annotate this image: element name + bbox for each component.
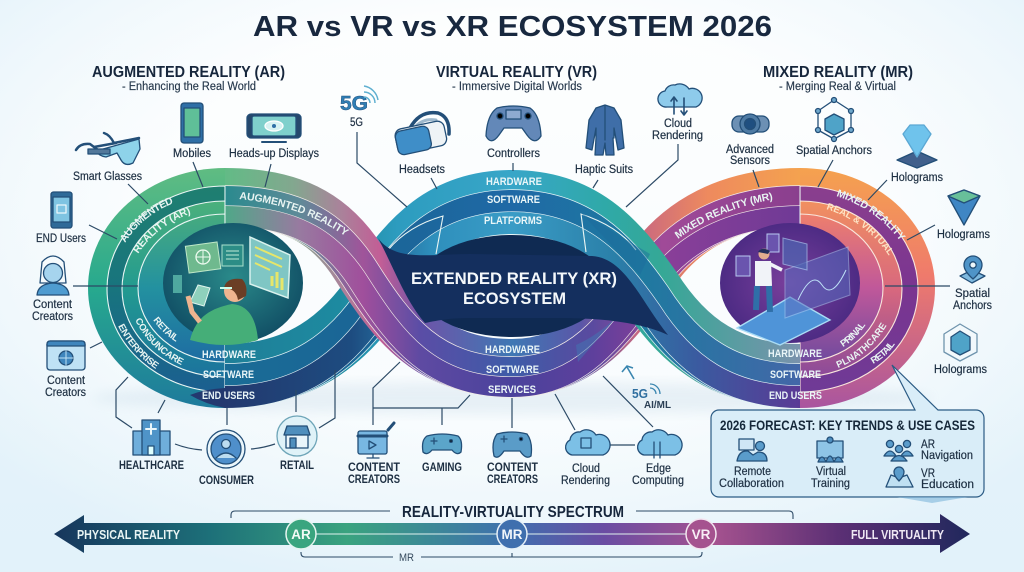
label: VR education — [921, 468, 974, 491]
icon: heads-up display — [247, 114, 301, 142]
ring labels: VR top: SOFTWARE — [487, 194, 540, 206]
label: spatial anchors 2: Spatial — [955, 288, 990, 300]
icon: hologram pyramid — [948, 190, 980, 225]
heading: virtual reality: VIRTUAL REALITY (VR) — [436, 64, 597, 81]
label: holograms 2: Holograms — [937, 229, 990, 241]
icon: sensor camera — [732, 114, 769, 134]
icon: phone scanning — [51, 192, 72, 228]
connector lines — [73, 132, 950, 450]
icon: spatial anchor cube — [816, 98, 854, 142]
label: content creators 2 bottom: CONTENT — [487, 462, 538, 474]
label: cloud rendering top: Cloud — [664, 118, 692, 130]
label: edge computing — [632, 463, 684, 487]
icon: video monitor — [358, 423, 394, 458]
ring labels: AR curved: CONSUNCARE — [136, 318, 184, 365]
ring labels: MR curved: HARDWARE — [768, 348, 822, 360]
ring labels: AR curved: END USERS — [202, 390, 255, 402]
marker: VR — [686, 519, 716, 549]
marker: AR — [286, 519, 316, 549]
label: cloud rendering bottom — [561, 463, 610, 487]
infinity ribbon diagram — [88, 168, 935, 414]
label: content creators 2: Content — [47, 375, 86, 387]
label: haptic suits: Haptic Suits — [575, 164, 633, 176]
label: content creators 2: Creators — [45, 387, 86, 399]
illustration: AR user at screens — [163, 223, 303, 345]
label: edge computing: Computing — [632, 475, 684, 487]
label: AR navigation — [921, 439, 973, 462]
icon: person — [37, 256, 69, 295]
ring labels: MR curved: RETAIL — [870, 343, 895, 364]
label: advanced sensors — [726, 144, 774, 167]
marker: VR: VR — [692, 527, 711, 542]
ring labels: XR bottom: HARDWARE — [485, 344, 540, 356]
ring labels: MR curved — [674, 189, 906, 402]
icon: haptic suit — [586, 105, 624, 155]
ring labels: AR curved: HARDWARE — [202, 349, 256, 361]
label: spatial anchors: Spatial Anchors — [796, 145, 872, 157]
label: cloud rendering top — [652, 118, 703, 142]
label: cloud rendering bottom: Cloud — [572, 463, 600, 475]
icon: game controller — [486, 106, 541, 141]
label: remote collaboration: Collaboration — [719, 478, 784, 490]
label: end users: END Users — [36, 233, 86, 245]
ribbon: MR right half — [512, 197, 800, 387]
heading: mixed reality — [763, 64, 913, 93]
icon: smart glasses — [76, 133, 140, 164]
label: content creators: CONTENT — [348, 462, 400, 474]
heading: forecast: 2026 FORECAST: KEY TRENDS & USE CASES — [720, 417, 975, 433]
label: healthcare: HEALTHCARE — [119, 460, 184, 472]
spectrum heading: REALITY-VIRTUALITY SPECTRUM — [402, 504, 624, 521]
label: cloud rendering bottom: Rendering — [561, 475, 610, 487]
label: VR education: Education — [921, 479, 974, 491]
label: spatial anchors 2: Anchors — [953, 300, 992, 312]
ring labels: MR curved: SOFTWARE — [770, 369, 821, 381]
text: XR title: EXTENDED REALITY (XR) — [411, 269, 617, 288]
icon: browser window — [47, 341, 85, 370]
label: virtual training — [811, 466, 850, 490]
label: mobiles: Mobiles — [173, 148, 211, 160]
label: advanced sensors: Sensors — [730, 155, 770, 167]
marker: MR — [497, 519, 527, 549]
title: AR vs VR vs XR ECOSYSTEM 2026 — [253, 11, 772, 43]
icon: hospital — [133, 420, 170, 455]
label: content creators 2 bottom: CREATORS — [487, 474, 538, 486]
icon: mobile — [181, 103, 203, 143]
label: 5G: 5G — [350, 117, 363, 129]
ring labels: AR curved — [118, 192, 350, 402]
label: physical reality: PHYSICAL REALITY — [77, 527, 180, 542]
label: content creators 1: Content — [33, 299, 73, 311]
icon: consumer — [207, 430, 245, 468]
icon: virtual training — [817, 437, 843, 462]
label: VR education: VR — [921, 468, 935, 480]
label: holograms 1: Holograms — [891, 172, 943, 184]
label: content creators 1: Creators — [32, 311, 73, 323]
label: full virtuality: FULL VIRTUALITY — [851, 527, 944, 542]
label: remote collaboration: Remote — [734, 466, 771, 478]
label: virtual training: Training — [811, 478, 850, 490]
icon: remote collaboration — [737, 439, 767, 461]
spectrum arrow — [54, 514, 970, 553]
ring labels: XR bottom: SOFTWARE — [486, 364, 539, 376]
icon: map pin — [960, 256, 985, 283]
label: heads-up displays: Heads-up Displays — [229, 148, 319, 160]
heading: augmented reality — [92, 64, 285, 93]
label: content creators 1 — [32, 299, 73, 323]
icon: cloud arrows — [658, 84, 702, 115]
MR range bracket: MR — [399, 552, 414, 564]
ring labels: MR curved: REAL & VIRTUAL — [826, 203, 892, 256]
icon: VR headset — [394, 113, 449, 156]
icon: gamepad 2 — [493, 432, 532, 457]
label: virtual training: Virtual — [816, 466, 846, 478]
spectrum heading — [231, 504, 793, 521]
label: remote collaboration — [719, 466, 784, 490]
ring labels: MR curved: MIXED REALITY — [836, 189, 906, 240]
label: controllers: Controllers — [487, 148, 540, 160]
callout: 5G AI/ML: AI/ML — [644, 399, 672, 411]
label: AR navigation: AR — [921, 439, 935, 451]
label: edge computing: Edge — [646, 463, 671, 475]
callout: 5G AI/ML: 5G — [632, 386, 648, 401]
label: headsets: Headsets — [399, 164, 445, 176]
icon: group navigation — [884, 440, 913, 461]
label: gaming: GAMING — [422, 462, 462, 474]
panel: left AR ring — [88, 168, 225, 408]
ring labels: AR curved: ENTERPRISE — [118, 324, 160, 369]
heading: augmented reality: AUGMENTED REALITY (AR) — [92, 64, 285, 81]
ribbon: XR crossing band — [225, 202, 800, 397]
ring labels: MR curved: END USERS — [769, 390, 822, 402]
icon: 5G signal — [340, 86, 378, 115]
label: consumer: CONSUMER — [199, 475, 255, 487]
panel: 2026 forecast — [711, 365, 984, 503]
label: advanced sensors: Advanced — [726, 144, 774, 156]
label: cloud rendering top: Rendering — [652, 130, 703, 142]
ring labels: AR curved: RETAIL — [153, 316, 176, 342]
ring labels: XR bottom: SERVICES — [488, 384, 536, 396]
label: spatial anchors 2 — [953, 288, 992, 312]
heading: virtual reality — [436, 64, 597, 93]
icon: 5G signal: 5G — [340, 93, 368, 115]
marker: AR: AR — [291, 527, 311, 542]
heading: mixed reality: MIXED REALITY (MR) — [763, 64, 913, 81]
heading: virtual reality: - Immersive Digital Worlds — [452, 81, 582, 93]
label: retail: RETAIL — [280, 460, 314, 472]
label: AR navigation: Navigation — [921, 450, 973, 462]
ring labels: VR top — [484, 176, 542, 227]
ring labels: VR top: PLATFORMS — [484, 215, 542, 227]
callout: 5G AI/ML — [622, 366, 672, 411]
icon: map pin education — [886, 467, 913, 487]
ring dividers — [225, 186, 800, 362]
ring labels: AR curved: AUGMENTED — [120, 198, 172, 243]
label: holograms 3: Holograms — [934, 364, 987, 376]
icon: hologram diamond — [897, 125, 937, 168]
ribbon: AR left half — [225, 197, 512, 387]
marker: MR: MR — [502, 527, 523, 542]
ring labels: MR curved: PRINAL — [840, 324, 866, 347]
heading: mixed reality: - Merging Real & Virtual — [779, 81, 896, 93]
ring labels: VR top: HARDWARE — [486, 176, 542, 188]
icon: retail store — [277, 416, 317, 456]
icon: gamepad — [422, 434, 462, 454]
text: XR title: ECOSYSTEM — [463, 289, 566, 308]
panel: right MR ring — [800, 168, 935, 408]
icon: hologram cube — [944, 324, 977, 361]
label: content creators: CREATORS — [348, 474, 400, 486]
ring labels: AR curved: AUGMENTED REALITY — [239, 192, 350, 235]
ring labels: AR curved: REALITY (AR) — [132, 207, 190, 254]
illustration: MR user at hologram — [720, 223, 860, 345]
icon: edge cloud — [638, 430, 682, 458]
ring labels: AR curved: SOFTWARE — [203, 369, 254, 381]
ring labels: XR bottom — [485, 344, 540, 396]
label: content creators 2 — [45, 375, 86, 399]
ring labels: MR curved: PLNATHCARE — [836, 322, 886, 368]
heading: augmented reality: - Enhancing the Real World — [122, 81, 256, 93]
ring labels: MR curved: MIXED REALITY (MR) — [674, 192, 772, 239]
label: content creators 2 bottom — [487, 462, 538, 486]
icon: cloud chip — [566, 430, 610, 455]
label: smart glasses: Smart Glasses — [73, 171, 142, 183]
label: content creators — [348, 462, 400, 486]
text: XR title — [411, 269, 617, 308]
center XR banner — [378, 235, 668, 337]
MR range bracket — [301, 552, 702, 564]
